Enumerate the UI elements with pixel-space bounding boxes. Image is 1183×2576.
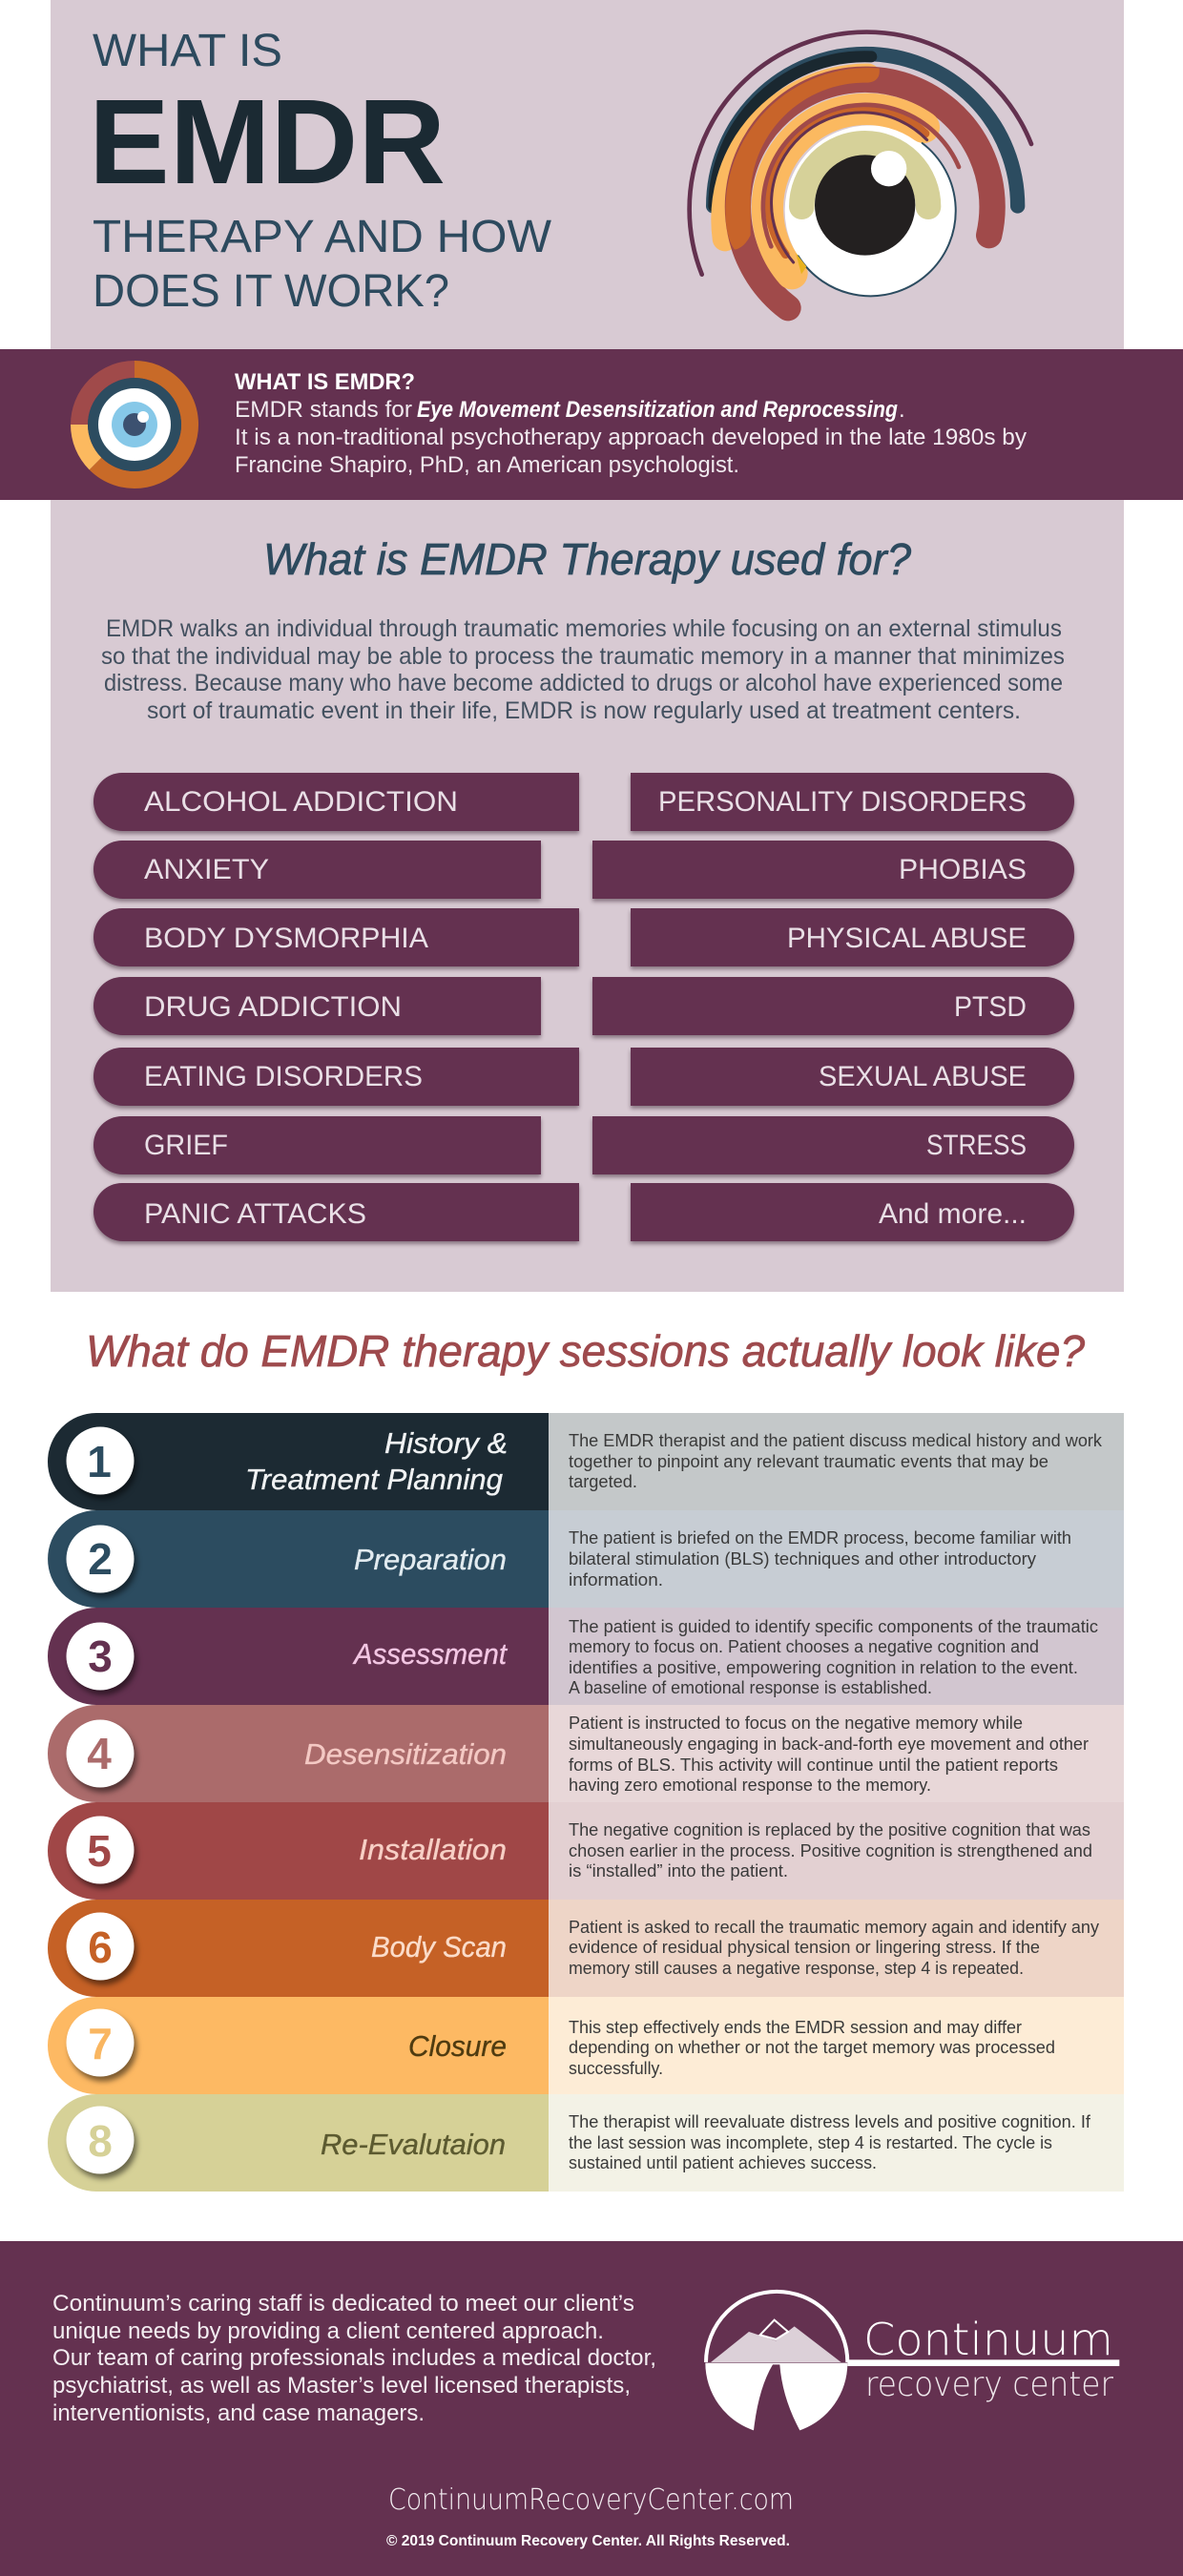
website url: ContinuumRecoveryCenter.com — [388, 2483, 794, 2517]
pill: sexual abuse: SEXUAL ABUSE — [819, 1061, 1027, 1092]
step 4: desensitization: Patient is instructed to focus on the negative memory while — [569, 1714, 1023, 1733]
step 1: history and treatment planning: Treatment Planning — [245, 1463, 503, 1496]
step 6: body scan: memory still causes a negative response, step 4 is repeated. — [569, 1959, 1024, 1978]
pill: eating disorders — [93, 1048, 579, 1106]
steps list — [48, 1413, 1124, 2192]
step 1: history and treatment planning: together to pinpoint any relevant traumatic events that may be — [569, 1452, 1048, 1471]
step 1: history and treatment planning: The EMDR therapist and the patient discuss medical history and work — [569, 1431, 1103, 1450]
step 2: preparation: The patient is briefed on the EMDR process, become familiar with — [569, 1528, 1071, 1548]
pill: stress: STRESS — [926, 1130, 1027, 1161]
panel: what is EMDR band — [0, 349, 1183, 500]
step 8: re-evaluation: The therapist will reevaluate distress levels and positive cognition. If — [569, 2112, 1091, 2131]
step 1: history and treatment planning — [48, 1413, 1124, 1510]
step 4: desensitization: having zero emotional response to the memory. — [569, 1776, 931, 1795]
text block: intro paragraph: so that the individual may be able to process the traumatic memory in a manner that minimizes — [101, 643, 1065, 670]
pill: personality disorders — [631, 773, 1074, 831]
pill: phobias: PHOBIAS — [899, 854, 1027, 885]
pill: grief: GRIEF — [144, 1130, 228, 1161]
step 3: assessment — [48, 1608, 1124, 1705]
pill: phobias — [592, 841, 1074, 899]
pill: physical abuse — [631, 908, 1074, 966]
step 8: re-evaluation: sustained until patient achieves success. — [569, 2153, 877, 2172]
logo: Continuum Recovery Center — [705, 2292, 1119, 2430]
heading: used for: What is EMDR Therapy used for? — [263, 534, 911, 584]
pill: stress — [592, 1116, 1074, 1174]
text block: intro paragraph: distress. Because many who have become addicted to drugs or alcohol have experienced some — [104, 670, 1063, 696]
step 5: installation — [48, 1802, 1124, 1900]
text block: EMDR definition: . — [899, 397, 905, 423]
conditions list: right column — [592, 773, 1074, 1241]
step 4: desensitization: Desensitization — [304, 1737, 507, 1771]
step 7: closure: 7 — [88, 2019, 113, 2068]
step 3: assessment: memory to focus on. Patient chooses a negative cognition and — [569, 1637, 1039, 1656]
text block: EMDR definition: It is a non-traditional psychotherapy approach developed in the late 1980s by — [235, 425, 1027, 450]
text block: staff description: unique needs by providing a client centered approach. — [52, 2318, 604, 2344]
step 4: desensitization — [48, 1705, 1124, 1802]
logo: Continuum Recovery Center: recovery center — [865, 2365, 1113, 2404]
icon: large stylised eye with concentric arcs — [690, 32, 1031, 308]
pill: eating disorders: EATING DISORDERS — [144, 1061, 423, 1092]
step 2: preparation — [48, 1510, 1124, 1608]
text block: EMDR definition: Eye Movement Desensitization and Reprocessing — [417, 397, 898, 423]
pill: drug addiction — [93, 977, 541, 1035]
step 6: body scan: Patient is asked to recall the traumatic memory again and identify any — [569, 1918, 1099, 1937]
pill: alcohol addiction: ALCOHOL ADDICTION — [144, 786, 458, 818]
text block: staff description: interventionists, and case managers. — [52, 2400, 425, 2426]
text block: staff description: Continuum’s caring staff is dedicated to meet our client’s — [52, 2291, 634, 2316]
title: DOES IT WORK? — [93, 266, 449, 317]
step 6: body scan: 6 — [88, 1922, 113, 1972]
text block: EMDR definition: EMDR stands for — [235, 397, 412, 423]
conditions list: left column — [93, 773, 579, 1241]
pill: panic attacks — [93, 1183, 579, 1241]
text block: staff description — [52, 2291, 656, 2426]
pill: personality disorders: PERSONALITY DISORDERS — [658, 786, 1027, 818]
step 7: closure: Closure — [408, 2029, 507, 2063]
title: THERAPY AND HOW — [93, 212, 552, 262]
step 4: desensitization: 4 — [87, 1729, 112, 1778]
step 1: history and treatment planning: History & — [384, 1426, 508, 1460]
pill: body dysmorphia: BODY DYSMORPHIA — [144, 923, 428, 954]
step 6: body scan: evidence of residual physical tension or lingering stress. If the — [569, 1938, 1040, 1957]
step 8: re-evaluation: the last session was incomplete, step 4 is restarted. The cycle is — [569, 2133, 1052, 2152]
step 3: assessment: identifies a positive, empowering cognition in relation to the event. — [569, 1658, 1078, 1677]
logo: Continuum Recovery Center: Continuum — [863, 2314, 1113, 2365]
pill: panic attacks: PANIC ATTACKS — [144, 1198, 366, 1230]
heading: sessions: What do EMDR therapy sessions actually look like? — [86, 1326, 1085, 1376]
text block: EMDR definition — [235, 369, 1027, 478]
text block: EMDR definition: WHAT IS EMDR? — [235, 369, 415, 395]
step 8: re-evaluation — [48, 2094, 1124, 2192]
step 3: assessment: A baseline of emotional response is established. — [569, 1678, 932, 1697]
text block: intro paragraph: EMDR walks an individual through traumatic memories while focusing on an external stimulus — [106, 615, 1062, 642]
step 4: desensitization: simultaneously engaging in back-and-forth eye movement and other — [569, 1735, 1089, 1754]
title — [89, 26, 552, 317]
pill: body dysmorphia — [93, 908, 579, 966]
step 3: assessment: Assessment — [352, 1637, 508, 1671]
step 7: closure — [48, 1997, 1124, 2094]
pill: ptsd: PTSD — [954, 991, 1027, 1023]
step 5: installation: Installation — [359, 1833, 507, 1866]
pill: and more — [631, 1183, 1074, 1241]
step 3: assessment: The patient is guided to identify specific components of the traumatic — [569, 1617, 1098, 1636]
step 6: body scan — [48, 1900, 1124, 1997]
panel: footer — [0, 2241, 1183, 2576]
step 5: installation: The negative cognition is replaced by the positive cognition that was — [569, 1820, 1090, 1839]
pill: sexual abuse — [631, 1048, 1074, 1106]
step 1: history and treatment planning: targeted. — [569, 1472, 637, 1491]
step 8: re-evaluation: Re-Evalutaion — [321, 2128, 506, 2161]
step 2: preparation: information. — [569, 1570, 663, 1589]
step 4: desensitization: forms of BLS. This activity will continue until the patient reports — [569, 1755, 1058, 1775]
step 7: closure: This step effectively ends the EMDR session and may differ — [569, 2018, 1022, 2037]
text block: intro paragraph — [101, 615, 1065, 724]
text block: intro paragraph: sort of traumatic event in their life, EMDR is now regularly used at treatment centers. — [147, 697, 1021, 724]
pill: physical abuse: PHYSICAL ABUSE — [787, 923, 1027, 954]
text block: EMDR definition: Francine Shapiro, PhD, an American psychologist. — [235, 452, 739, 478]
pill: alcohol addiction — [93, 773, 579, 831]
step 5: installation: 5 — [87, 1826, 112, 1876]
pill: anxiety — [93, 841, 541, 899]
step 7: closure: depending on whether or not the target memory was processed — [569, 2038, 1055, 2057]
step 5: installation: is “installed” into the patient. — [569, 1861, 788, 1880]
panel: what EMDR is used for — [51, 500, 1124, 1292]
text block: staff description: psychiatrist, as well as Master’s level licensed therapists, — [52, 2373, 631, 2399]
copyright: © 2019 Continuum Recovery Center. All Rights Reserved. — [386, 2533, 790, 2549]
title: EMDR — [89, 74, 446, 209]
step 2: preparation: 2 — [88, 1534, 113, 1584]
title: WHAT IS — [93, 26, 282, 76]
step 2: preparation: bilateral stimulation (BLS) techniques and other introductory — [569, 1549, 1036, 1568]
step 8: re-evaluation: 8 — [88, 2116, 113, 2166]
panel: header — [51, 0, 1124, 350]
step 6: body scan: Body Scan — [371, 1930, 507, 1963]
pill: grief — [93, 1116, 541, 1174]
step 3: assessment: 3 — [88, 1631, 113, 1681]
icon: small eye in ring — [79, 369, 190, 480]
pill: drug addiction: DRUG ADDICTION — [144, 991, 402, 1023]
step 1: history and treatment planning: 1 — [87, 1437, 112, 1486]
pill: ptsd — [592, 977, 1074, 1035]
pill: and more: And more... — [879, 1198, 1027, 1230]
text block: staff description: Our team of caring professionals includes a medical doctor, — [52, 2345, 656, 2371]
step 5: installation: chosen earlier in the process. Positive cognition is strengthened and — [569, 1841, 1092, 1860]
pill: anxiety: ANXIETY — [144, 854, 269, 885]
step 2: preparation: Preparation — [354, 1543, 507, 1576]
step 7: closure: successfully. — [569, 2059, 663, 2078]
